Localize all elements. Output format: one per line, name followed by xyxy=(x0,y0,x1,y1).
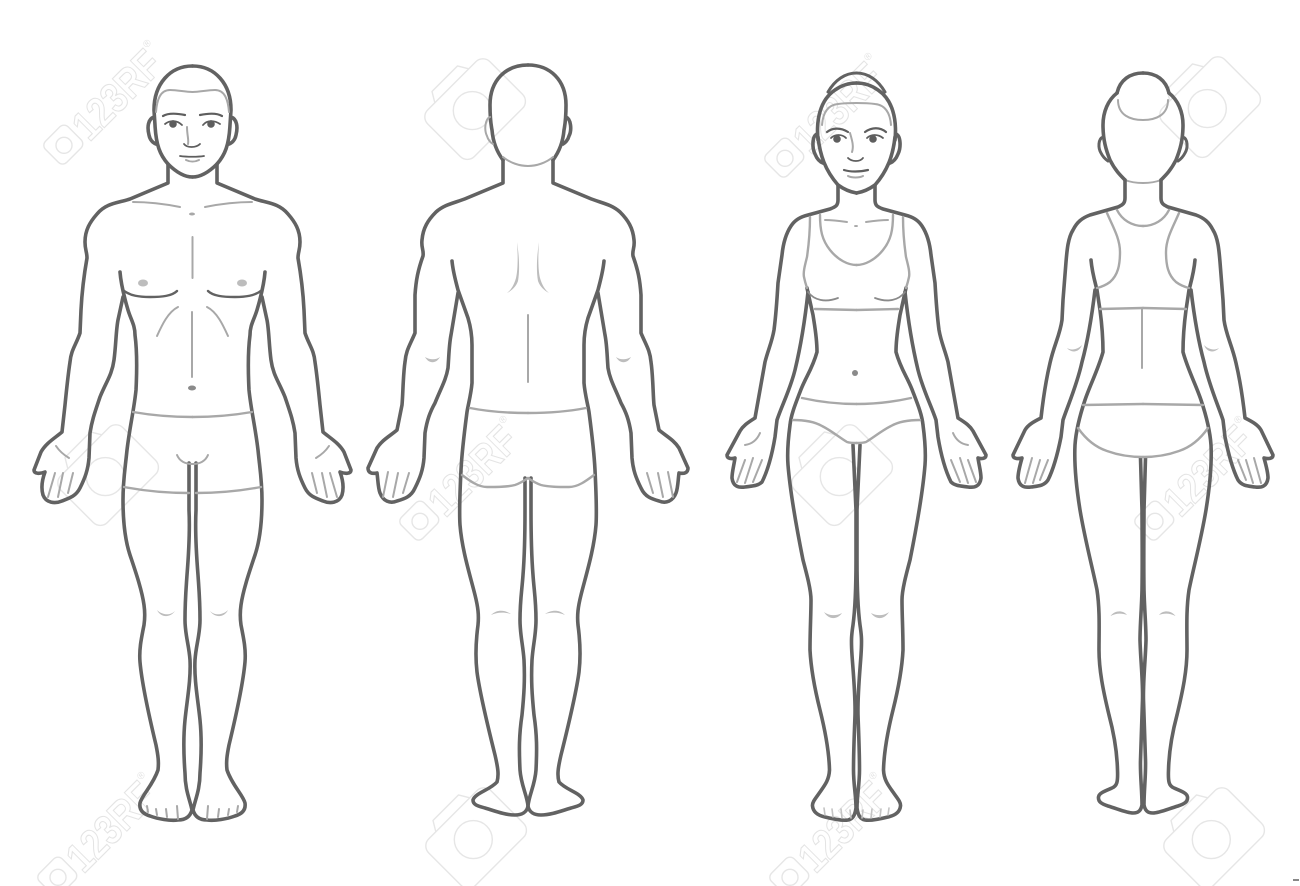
watermark: logo text right: ® xyxy=(1232,413,1246,427)
watermark: logo text centre: 123RF xyxy=(419,417,527,525)
watermark: logo text top centre right: 123RF xyxy=(784,54,892,162)
figure: male front xyxy=(34,66,351,820)
watermark: camera icon top right xyxy=(1149,46,1265,162)
male back ears and spine xyxy=(485,117,571,382)
male front right half mirrored xyxy=(192,66,351,820)
figure: female back xyxy=(1013,73,1273,813)
figure: male back xyxy=(368,65,688,815)
male back left half xyxy=(368,65,528,815)
watermark: logo text bottom centre right: ® xyxy=(867,769,881,783)
corner mark xyxy=(1293,879,1299,881)
watermark: camera icon bottom centre xyxy=(415,777,531,886)
female back right half mirrored xyxy=(1143,73,1273,813)
figure: female front xyxy=(727,73,986,820)
watermark: logo text top left: 123RF xyxy=(63,41,171,149)
watermark: logo text right xyxy=(1128,410,1268,550)
watermark: logo text top centre right xyxy=(758,47,898,187)
female back spine line xyxy=(1141,309,1143,368)
watermark: logo text bottom left: 123RF xyxy=(57,773,165,881)
watermark: logo text top centre right: ® xyxy=(862,50,876,64)
watermark: logo text bottom centre right: 123RF xyxy=(789,773,897,881)
watermark: camera icon bottom right xyxy=(1153,777,1269,886)
watermark: logo text top left xyxy=(37,34,177,174)
watermark: logo text bottom left: ® xyxy=(135,769,149,783)
female front right half mirrored xyxy=(856,73,986,820)
watermark: logo text centre xyxy=(393,410,533,550)
female front left half xyxy=(727,73,856,820)
female front face and navel xyxy=(827,128,886,376)
male front face and chest marks xyxy=(163,114,222,390)
watermark: camera icon over female front hip xyxy=(781,414,897,530)
male front left half xyxy=(34,66,192,820)
male back right half mirrored xyxy=(528,65,688,815)
watermark: logo text top left: ® xyxy=(141,37,155,51)
watermark: logo text centre: ® xyxy=(497,413,511,427)
watermark: logo text right: 123RF xyxy=(1154,417,1262,525)
watermark: camera icon over male back head xyxy=(414,48,530,164)
watermark: camera icon over male front hip xyxy=(47,414,163,530)
female back left half xyxy=(1013,73,1143,813)
